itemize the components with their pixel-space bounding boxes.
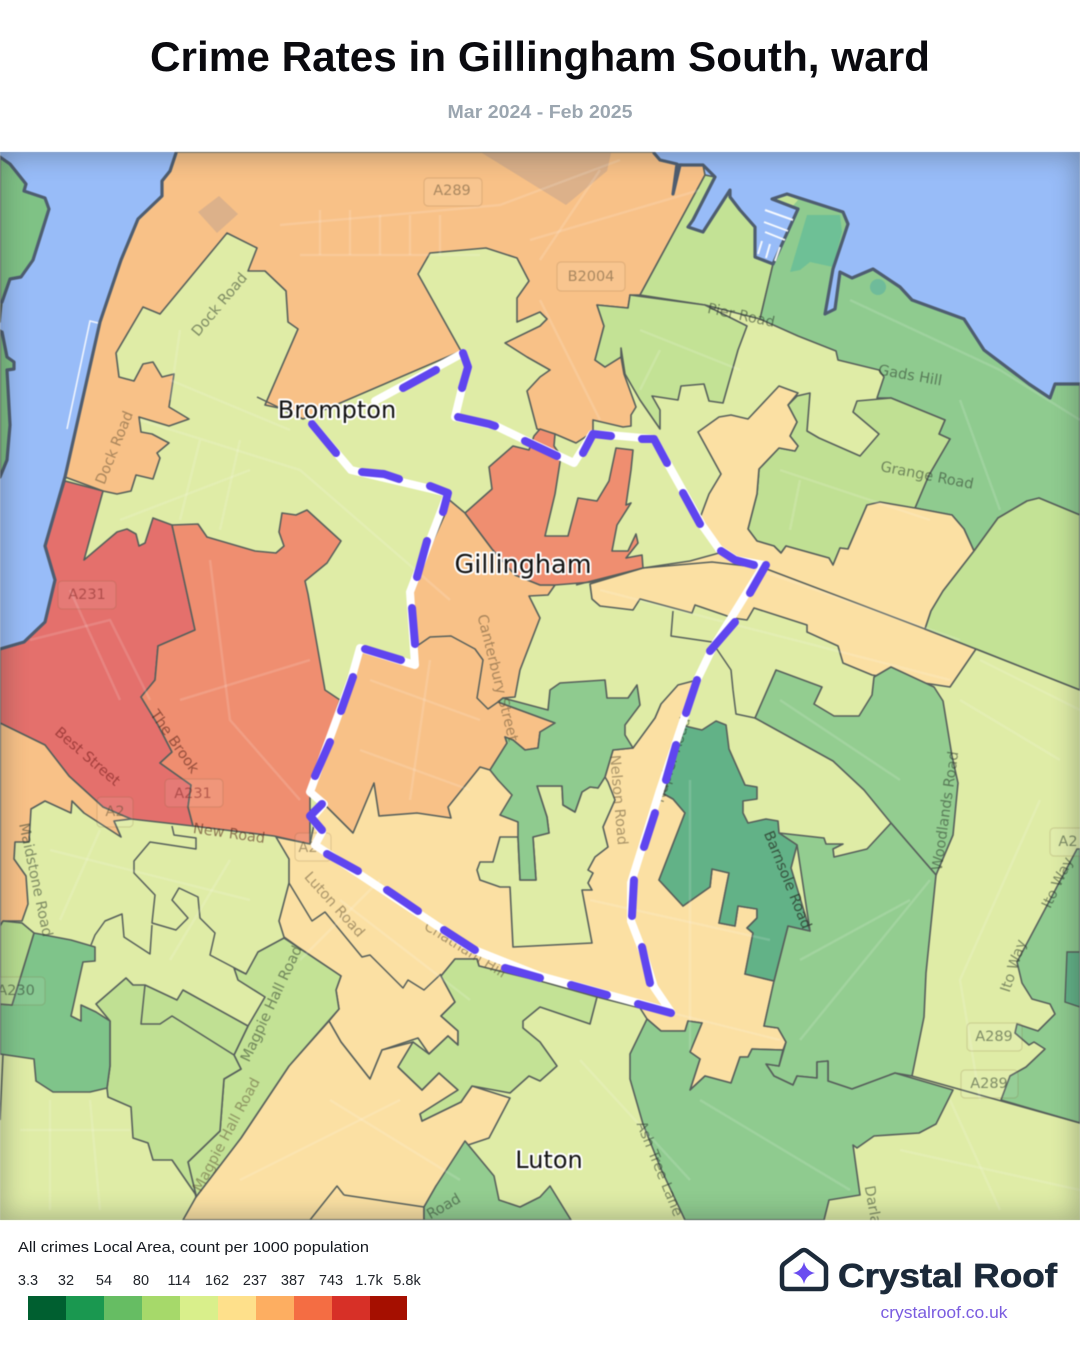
area: peach central ward (276, 680, 786, 1090)
icon: house with star (782, 1250, 826, 1289)
logo: Crystal Roof (780, 1248, 1058, 1322)
road labels: Canterbury Street (473, 613, 521, 743)
road labels: The Brook (146, 707, 202, 777)
ward boundary: white base line (310, 353, 764, 1012)
road labels: Best Street (51, 724, 123, 790)
road shield: A231 lower: A231 (174, 786, 212, 802)
marina pontoons (758, 210, 793, 261)
legend scale values (18, 1273, 421, 1289)
area: light green Magpie Hall east (188, 938, 341, 1197)
area: orange ward centre (310, 498, 555, 833)
road shield: A289 east lower: A289 (970, 1076, 1008, 1092)
road labels (15, 270, 1077, 1226)
road labels: Ash Tree Lane (633, 1119, 685, 1219)
ward boundary: purple dashes (310, 353, 766, 1013)
road shield: A2 west: A2 (105, 804, 125, 820)
road labels: Grange Road (879, 459, 975, 493)
road labels: Magpie Hall Road (190, 1076, 264, 1194)
legend scale values: 237 (243, 1273, 267, 1289)
road shield: A2 far east (1050, 828, 1080, 856)
road labels: Gads Hill (877, 363, 943, 389)
road shield: B2004: B2004 (568, 269, 614, 285)
area: salmon zone west (141, 510, 341, 844)
internal ward boundaries (0, 397, 1080, 1220)
legend scale values: 80 (133, 1273, 149, 1289)
road labels: New Road (192, 821, 266, 847)
road shield: A289 east upper (967, 1023, 1022, 1051)
place label: Luton: Luton (515, 1146, 583, 1174)
road labels: Magpie Hall Road (238, 943, 306, 1065)
area: salmon Gillingham centre (465, 429, 643, 585)
road labels: Napier Road (652, 715, 694, 805)
legend scale values: 162 (205, 1273, 229, 1289)
area: dark green square far east (1065, 952, 1080, 1007)
road shield: A289 east lower (961, 1070, 1018, 1098)
dockyard dark detail and pond (790, 215, 886, 295)
road labels: Dock Road (93, 409, 137, 487)
legend scale values: 5.8k (393, 1273, 421, 1289)
road shield: A289 north: A289 (433, 183, 471, 199)
legend scale values: 743 (319, 1273, 343, 1289)
legend (18, 1239, 421, 1320)
legend scale values: 32 (58, 1273, 74, 1289)
road labels: Nelson Road (606, 754, 630, 846)
water: river and estuary (0, 152, 1080, 649)
area: light green Magpie Hall west (96, 978, 248, 1195)
road shield: B2004 (557, 262, 625, 291)
road shield: A231 lower (165, 779, 223, 807)
road shield: A231 upper (58, 581, 116, 609)
road labels: Luton Road (301, 869, 367, 941)
area: light green east (925, 498, 1080, 690)
road labels: Maidstone Road (15, 822, 55, 938)
road labels: Ito Way (998, 937, 1030, 994)
road labels: Ito Way (1039, 855, 1077, 911)
road labels: Pier Road (706, 301, 776, 331)
road shield: A231 upper: A231 (68, 587, 106, 603)
area: light green Grange Road (748, 393, 950, 565)
area: mid-green Canterbury Street patch (490, 680, 640, 880)
area: Upnor green west bank (0, 157, 49, 477)
area: brown industrial blocks (198, 153, 611, 233)
title: Crime Rates in Gillingham South, ward (150, 33, 930, 80)
area: mid-green Gads Hill (760, 194, 1080, 551)
area: light green Luton north (398, 959, 597, 1121)
road shield: A2 centre (295, 833, 331, 861)
area: mid-green A230 (0, 933, 110, 1092)
legend scale values: 54 (96, 1273, 112, 1289)
website url: crystalroof.co.uk (880, 1304, 1008, 1322)
subtitle: date range: Mar 2024 - Feb 2025 (448, 101, 632, 122)
road labels: Dock Road (189, 270, 251, 340)
coastline (0, 153, 1080, 649)
road labels: Chatham Hill (421, 918, 509, 982)
road shield: A289 north (424, 178, 482, 206)
place label: Brompton: Brompton (278, 396, 396, 424)
map edge shading (0, 152, 1080, 1220)
legend scale values: 387 (281, 1273, 305, 1289)
area: light green strip west (0, 921, 34, 1005)
area: dark green Barnsole (659, 721, 810, 981)
choropleth map (0, 151, 1080, 1221)
area: mid-green south, Ash Tree Lane (630, 1019, 953, 1220)
area: pale patch beside Nelson Road (477, 777, 615, 947)
road labels: Woodlands Road (930, 750, 962, 872)
road shield: A2 centre: A2 (298, 840, 318, 856)
area: light green Pier Road south (595, 295, 747, 429)
area: peach Magpie Hall south (183, 1021, 510, 1220)
pier outline on river (67, 321, 98, 429)
area: peach station band (590, 386, 976, 687)
area: highest-rate red zone (0, 481, 195, 826)
place label: Gillingham: Gillingham (454, 550, 592, 580)
legend scale values: 1.7k (355, 1273, 383, 1289)
logo wordmark: Crystal Roof (838, 1258, 1058, 1295)
area: green Luton south patch (424, 1141, 571, 1220)
road labels: Barnsole Road (760, 829, 814, 931)
legend scale values: 114 (167, 1273, 191, 1289)
road shield: A2 far east: A2 (1058, 834, 1078, 850)
road shield: A230 (0, 977, 45, 1005)
area: mid-green Ito Way east (1001, 849, 1080, 1123)
area: north orange band (65, 152, 705, 494)
area: orange south-west (0, 723, 131, 926)
road shield: A2 west (97, 797, 133, 827)
street network overlay (20, 160, 1080, 1210)
area: mid-green Barnsole south (764, 823, 936, 1089)
legend scale values: 3.3 (18, 1273, 38, 1289)
area: lime wedge at marina (774, 195, 798, 208)
area: light green Pier Road north (640, 175, 773, 319)
legend colour bar (28, 1296, 407, 1320)
road shield: A289 east upper: A289 (975, 1029, 1013, 1045)
area: mid-green north of Barnsole (755, 667, 958, 875)
legend heading: All crimes Local Area, count per 1000 population (18, 1239, 369, 1256)
